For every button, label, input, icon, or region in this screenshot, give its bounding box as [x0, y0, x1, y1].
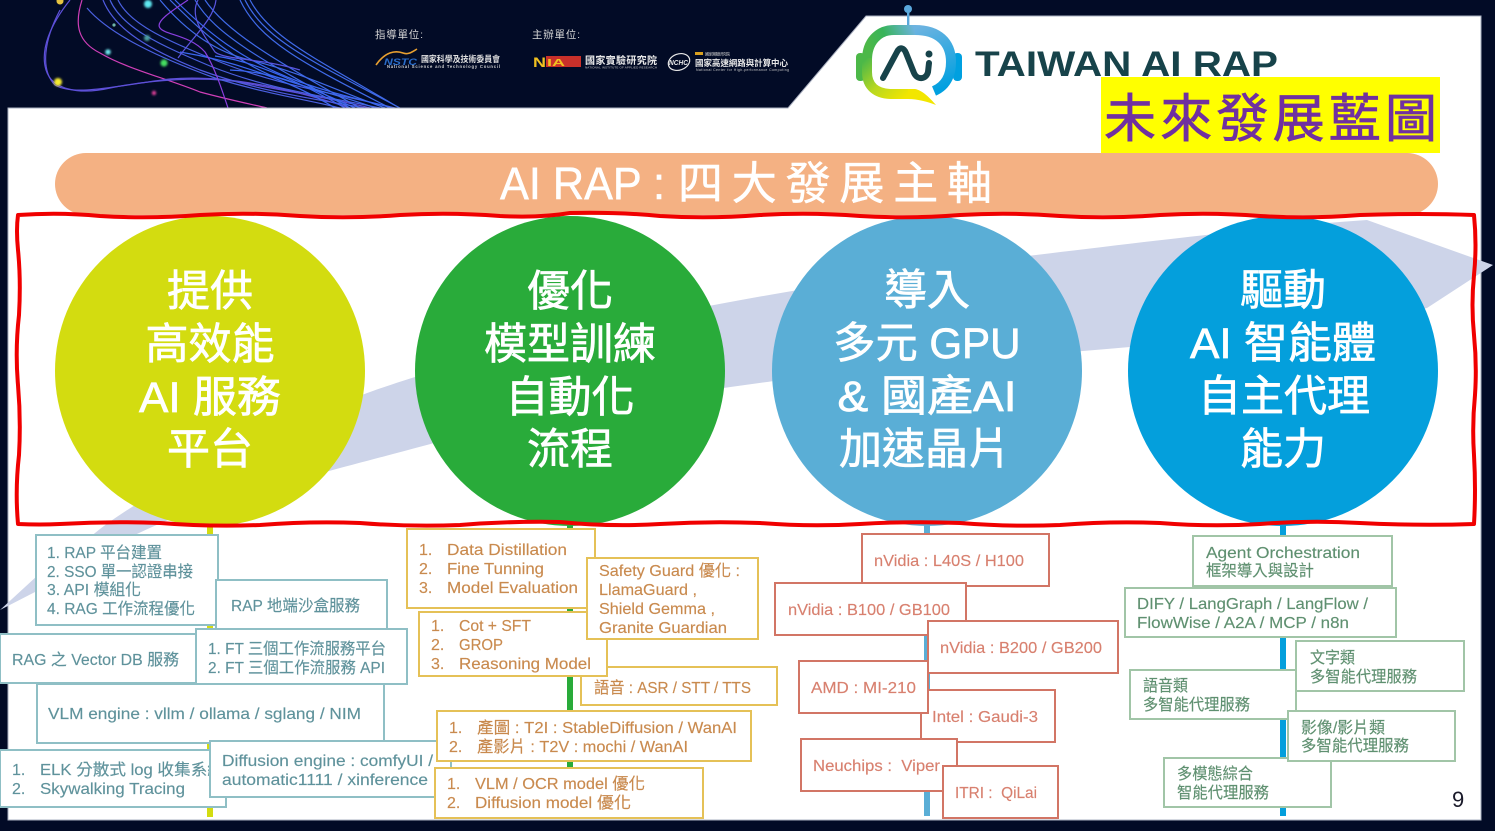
circle: GPU: 多元 GPU — [834, 320, 1020, 368]
yellow box: image and video generation: 1. — [449, 720, 462, 737]
teal box: platform list: 1. RAP 平台建置 — [47, 544, 162, 562]
green box: image and video agents — [1288, 711, 1455, 761]
logo: NSTC — [376, 49, 500, 69]
yellow box: safety guard: Shield Gemma , — [599, 601, 715, 618]
red box: ITRI: ITRI : QiLai — [955, 785, 1037, 802]
circle: platform: 平台 — [167, 426, 253, 474]
red box: Intel — [921, 690, 1055, 742]
circle: GPU — [772, 216, 1082, 526]
green box: multimodal agents: 多模態綜合 — [1177, 765, 1253, 783]
yellow box: reasoning — [419, 612, 607, 676]
teal box: vector DB — [0, 634, 200, 683]
red box: Neuchips — [801, 739, 957, 791]
circle: model training: 優化 — [527, 268, 613, 316]
yellow box: image and video generation — [437, 711, 751, 761]
yellow box: safety guard: LlamaGuard , — [599, 582, 697, 599]
yellow box: reasoning: 3. — [431, 656, 444, 673]
red box: B100: nVidia : B100 / GB100 — [788, 602, 950, 619]
green box: multimodal agents: 智能代理服務 — [1177, 784, 1269, 802]
yellow box: safety guard — [587, 558, 758, 639]
green box: image and video agents: 影像/影片類 — [1301, 719, 1385, 737]
teal box: logging: 2. — [12, 781, 25, 798]
header: organiser labels and logos — [375, 28, 789, 73]
yellow box: model optimisation: 1. — [447, 776, 460, 793]
logo: NSTC: National Science and Technology Council — [387, 64, 500, 69]
label: organising unit: 主辦單位: — [532, 28, 580, 41]
logo: NIAR: IA — [547, 58, 565, 69]
red box: AMD: AMD : MI-210 — [811, 680, 916, 697]
green box: speech agents — [1130, 670, 1296, 719]
label: supervising unit: 指導單位: — [375, 28, 423, 41]
timeline stems — [207, 520, 1286, 817]
teal box: diffusion engine: automatic1111 / xinference — [222, 772, 428, 789]
red box: AMD — [799, 661, 928, 713]
teal box: on-prem sandbox — [216, 580, 387, 629]
red box: Neuchips: Neuchips : Viper — [813, 758, 941, 775]
green box: text agents — [1296, 641, 1464, 691]
circle: agents — [1128, 216, 1438, 526]
yellow box: speech: 語音 : ASR / STT / TTS — [594, 679, 751, 697]
circle: agents: 自主代理 — [1198, 373, 1370, 421]
logo wordmark: TAIWAN AI RAP — [975, 45, 1278, 84]
red box: B200: nVidia : B200 / GB200 — [940, 640, 1102, 657]
teal box: platform list: 2. SSO 單一認證串接 — [47, 563, 193, 581]
logo: NCHC: NCHC — [669, 60, 689, 67]
circle: GPU: & 國產AI — [838, 373, 1016, 421]
teal box: logging: 1. — [12, 762, 25, 779]
heading bar: four axes — [55, 153, 1438, 215]
logo: NCHC: 國家實驗研究院 — [705, 50, 730, 56]
green box: text agents: 文字類 — [1310, 649, 1355, 667]
red box: B100 — [775, 583, 966, 635]
yellow box: model optimisation — [435, 768, 703, 818]
yellow box: distillation: 1. — [419, 542, 432, 559]
circle: model training: 流程 — [527, 426, 613, 474]
heading bar: four axes: AI RAP : — [500, 158, 665, 209]
circle: GPU: 導入 — [884, 267, 970, 315]
circle: model training: 自動化 — [506, 374, 634, 422]
glowing dots — [54, 0, 168, 95]
teal box: vector DB: RAG 之 Vector DB 服務 — [12, 651, 179, 669]
teal box: FT workflows: 2. FT 三個工作流服務 API — [208, 659, 385, 677]
teal box: logging — [0, 750, 226, 807]
yellow box: reasoning: 2. — [431, 637, 444, 654]
yellow box: reasoning: Cot + SFT — [459, 618, 531, 635]
red box: L40S: nVidia : L40S / H100 — [874, 553, 1024, 570]
teal box: logging: Skywalking Tracing — [40, 781, 185, 798]
green box: orchestration: Agent Orchestration — [1206, 545, 1360, 562]
yellow box: safety guard: Granite Guardian — [599, 620, 727, 637]
teal box: VLM engine: VLM engine : vllm / ollama / sglang / NIM — [48, 706, 361, 723]
circle: model training: 模型訓練 — [484, 321, 656, 369]
yellow box: image and video generation: 產影片 : T2V : mochi / WanAI — [477, 738, 688, 756]
green box: multimodal agents — [1164, 758, 1331, 807]
yellow box: image and video generation: 2. — [449, 739, 462, 756]
logo: NCHC: National Center for High-performance Computing — [696, 68, 789, 72]
yellow box: distillation — [407, 529, 595, 608]
teal box: on-prem sandbox: RAP 地端沙盒服務 — [231, 597, 360, 615]
growth arrow behind circles — [0, 220, 1493, 610]
circle: agents: 能力 — [1240, 426, 1326, 474]
logo: NCHC: 國家高速網路與計算中心 — [695, 58, 788, 68]
green box: orchestration — [1193, 536, 1392, 586]
yellow box: model optimisation: 2. — [447, 795, 460, 812]
logo: NIAR: N — [533, 54, 546, 70]
yellow box: distillation: 2. — [419, 561, 432, 578]
circle: platform: 高效能 — [146, 321, 274, 369]
green box: frameworks: DIFY / LangGraph / LangFlow / — [1137, 596, 1369, 613]
green box: frameworks — [1125, 588, 1396, 637]
yellow box: model optimisation: Diffusion model 優化 — [475, 794, 631, 812]
yellow box: reasoning: GROP — [459, 637, 503, 654]
teal box: platform list: 4. RAG 工作流程優化 — [47, 600, 195, 618]
page number: 9 — [1452, 787, 1464, 812]
yellow box: distillation: 3. — [419, 580, 432, 597]
yellow box: image and video generation: 產圖 : T2I : StableDiffusion / WanAI — [477, 719, 737, 737]
logo: NSTC: 國家科學及技術委員會 — [421, 54, 500, 64]
green box: speech agents: 語音類 — [1143, 677, 1188, 695]
yellow box: distillation: Fine Tunning — [447, 561, 544, 578]
red box: ITRI — [943, 766, 1058, 818]
red hand-drawn highlight frame — [17, 213, 1476, 526]
yellow box: distillation: Data Distillation — [447, 542, 567, 559]
teal box: VLM engine — [37, 684, 384, 743]
title badge: 未來發展藍圖 — [1104, 91, 1437, 149]
red box: B200 — [928, 621, 1118, 673]
green box: orchestration: 框架導入與設計 — [1206, 561, 1314, 580]
circle: GPU: 加速晶片 — [839, 426, 1011, 474]
teal box: platform list — [36, 535, 218, 625]
red box: Intel: Intel : Gaudi-3 — [932, 709, 1038, 726]
green box: text agents: 多智能代理服務 — [1310, 668, 1417, 686]
circle: platform — [55, 216, 365, 526]
teal box: platform list: 3. API 模組化 — [47, 581, 141, 599]
teal box: diffusion engine — [210, 741, 451, 797]
red box: L40S — [862, 534, 1049, 586]
heading bar: four axes: 四 大 發 展 主 軸 — [678, 158, 992, 209]
logo: NSTC: NSTC — [384, 57, 418, 67]
yellow box: reasoning: Reasoning Model — [459, 656, 591, 673]
teal box: logging: ELK 分散式 log 收集系統 — [40, 761, 224, 779]
circle: model training — [415, 216, 725, 526]
yellow box: safety guard: Safety Guard 優化 : — [599, 562, 740, 580]
circle: agents: 驅動 — [1240, 267, 1326, 315]
teal box: FT workflows: 1. FT 三個工作流服務平台 — [208, 640, 386, 658]
yellow box: model optimisation: VLM / OCR model 優化 — [475, 775, 645, 793]
logo: NIAR: 國家實驗研究院 — [585, 54, 657, 67]
logo: NIAR — [533, 54, 657, 70]
teal box: FT workflows — [196, 629, 407, 684]
teal box: diffusion engine: Diffusion engine : comfyUI / — [222, 753, 434, 770]
yellow box: reasoning: 1. — [431, 618, 444, 635]
circle: platform: 提供 — [167, 268, 253, 316]
yellow box: speech — [581, 667, 777, 705]
green box: speech agents: 多智能代理服務 — [1143, 696, 1250, 714]
circle: agents: AI 智能體 — [1190, 320, 1376, 368]
header: light swirl decoration — [44, 0, 400, 108]
logo: NCHC — [666, 50, 789, 73]
green box: image and video agents: 多智能代理服務 — [1301, 737, 1409, 755]
logo: NIAR: NATIONAL INSTITUTE OF APPLIED RESEARCH — [585, 66, 657, 70]
logo icon: AI robot speech bubble — [856, 5, 962, 105]
yellow box: distillation: Model Evaluation — [447, 580, 578, 597]
green box: frameworks: FlowWise / A2A / MCP / n8n — [1137, 615, 1349, 632]
circle: platform: AI 服務 — [139, 374, 281, 422]
